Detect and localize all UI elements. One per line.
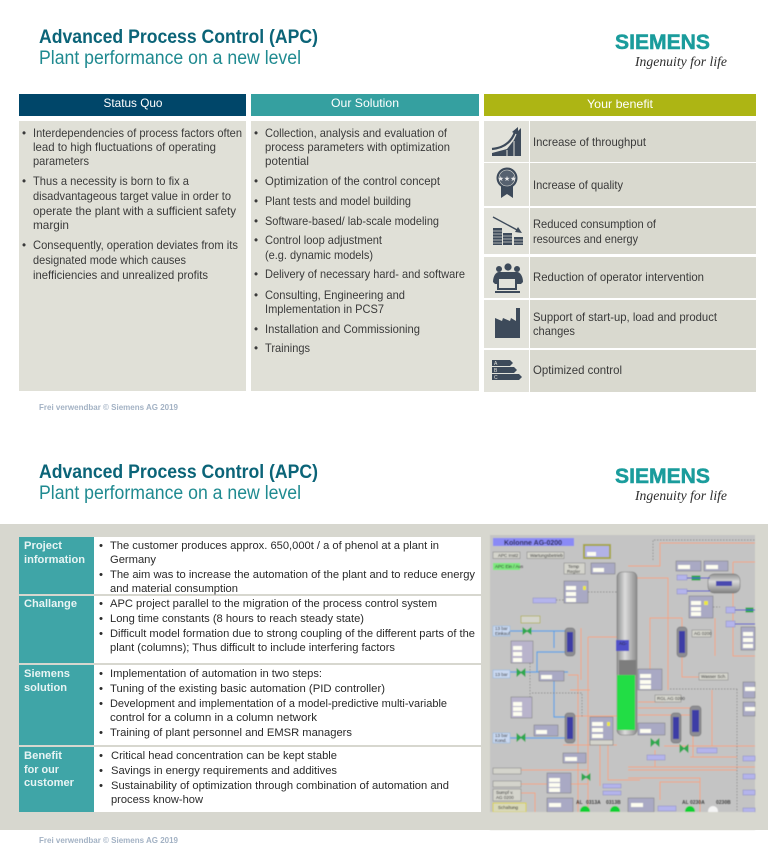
logo: Siemens: SIEMENS <box>615 465 710 488</box>
title: Advanced Process Control: Advanced Process Control (APC) <box>39 27 318 48</box>
heading: Your benefit: Your benefit <box>587 97 654 111</box>
text block: status quo bullets: Thus a necessity is born to fix a <box>33 175 190 188</box>
subtitle: Plant performance: Plant performance on a new level <box>39 48 301 69</box>
control buttons: Wasser Sch. <box>701 674 726 679</box>
row: benefit for our customer: Sustainability of optimization through combination of automation and <box>111 780 449 792</box>
logo: Siemens: SIEMENS <box>615 31 710 54</box>
text block: status quo bullets: margin <box>33 219 69 232</box>
logo: Siemens: Ingenuity for life <box>634 54 727 69</box>
text block: solution bullets: • <box>254 234 258 247</box>
text block: solution bullets: process parameters with optimization <box>265 141 450 154</box>
benefit row: consumption <box>484 208 756 254</box>
text block: solution bullets: Control loop adjustment <box>265 234 383 247</box>
stream labels <box>493 575 755 812</box>
row: challenge: • <box>99 613 103 625</box>
icon: factory <box>495 308 520 338</box>
row: challenge: plant (columns); Thus difficult to include interfering factors <box>110 642 395 654</box>
row: Siemens solution: • <box>99 668 103 680</box>
subtitle: Plant performance: Plant performance on a new level <box>39 483 301 504</box>
text block: status quo bullets: operate the plant with a sufficient safety <box>33 205 236 218</box>
stream labels: 13 bar <box>495 626 508 631</box>
text block: status quo bullets: • <box>22 239 26 252</box>
stream labels: Kond. <box>495 738 507 743</box>
main column AG-0200 <box>616 572 637 735</box>
text block: solution bullets: Collection, analysis and evaluation of <box>265 127 448 140</box>
stream labels: 13 bar <box>495 733 508 738</box>
text block: status quo bullets: designated mode which causes <box>33 254 186 267</box>
icon: energy class bars: C <box>494 375 498 381</box>
control buttons <box>493 552 728 812</box>
control buttons: APC Inst2 <box>498 553 519 558</box>
text block: solution bullets: • <box>254 323 258 336</box>
row: project information: • <box>99 569 103 581</box>
text block: status quo bullets: Interdependencies of process factors often <box>33 127 242 140</box>
row: project information <box>19 537 481 595</box>
row: benefit for our customer: process know-how <box>111 794 204 806</box>
small vessels <box>565 574 740 743</box>
benefit row: optimized control: Optimized control <box>533 364 622 377</box>
row: project information: • <box>99 540 103 552</box>
icon: energy class bars <box>492 360 522 381</box>
benefit row: start-up support: changes <box>533 325 575 338</box>
row: challenge: APC project parallel to the migration of the process control system <box>110 598 437 610</box>
row: benefit for our customer: • <box>99 780 103 792</box>
orange process lines <box>521 543 755 812</box>
process control screenshot <box>490 535 755 830</box>
row: benefit for our customer: Critical head concentration can be kept stable <box>111 750 337 762</box>
row: challenge: • <box>99 598 103 610</box>
main column AG-0200: AG- <box>619 641 628 646</box>
control buttons: AG 0200 <box>694 631 712 636</box>
text block: solution bullets: • <box>254 175 258 188</box>
row: Siemens solution: Implementation of automation in two steps: <box>110 668 322 680</box>
control buttons: Wartungsbetrieb <box>530 553 563 558</box>
row: challenge: Long time constants (8 hours to reach steady state) <box>110 613 364 625</box>
text block: solution bullets <box>254 127 465 355</box>
logo: Siemens <box>615 31 727 69</box>
text block: solution bullets: Software-based/ lab-scale modeling <box>265 215 439 228</box>
row: Siemens solution: • <box>99 698 103 710</box>
panel: status quo <box>19 94 246 391</box>
text block: solution bullets: Consulting, Engineering and <box>265 289 405 302</box>
dotted signal lines <box>530 540 755 812</box>
row: challenge: Difficult model formation due to strong coupling of the different parts of the <box>110 628 475 640</box>
stream labels: AL 0230A <box>682 800 705 806</box>
logo: Siemens <box>615 465 727 503</box>
heading: Status Quo: Status Quo <box>104 96 163 110</box>
text block: status quo bullets: • <box>22 127 26 140</box>
text block: solution bullets: Delivery of necessary hard- and software <box>265 268 465 281</box>
row: project information: The aim was to increase the automation of the plant and to reduce energy <box>110 569 475 581</box>
control buttons: Temp <box>568 564 580 569</box>
row: benefit for our customer: • <box>99 750 103 762</box>
row: Siemens solution: • <box>99 683 103 695</box>
row: benefit for our customer <box>19 747 481 812</box>
grey content band <box>0 524 768 830</box>
row: project information: Germany <box>110 554 156 566</box>
row: Siemens solution: Training of plant personnel and EMSR managers <box>110 727 352 739</box>
table: project details <box>19 537 481 812</box>
icon: people at a laptop <box>493 263 523 293</box>
benefit row: start-up support: Support of start-up, load and product <box>533 311 718 324</box>
row: benefit for our customer: Benefit <box>24 750 62 762</box>
row: project information: The customer produces approx. 650,000t / a of phenol at a plant in <box>110 540 439 552</box>
footer note: Frei verwendbar © Siemens AG 2019 <box>39 835 178 845</box>
row: Siemens solution: Tuning of the existing basic automation (PID controller) <box>110 683 385 695</box>
stream labels: AL <box>576 800 583 806</box>
control buttons: Schaltung <box>498 805 519 810</box>
slide 1: status quo, solution and benefit <box>19 27 756 412</box>
benefit row: operator intervention: Reduction of operator intervention <box>533 271 704 284</box>
title bar: Kolonne AG-0200: Kolonne AG-0200 <box>504 540 562 547</box>
heading: Our Solution <box>251 94 479 116</box>
row: Siemens solution: • <box>99 727 103 739</box>
text block: solution bullets: • <box>254 127 258 140</box>
row: Siemens solution <box>19 665 481 745</box>
control buttons: Sumpf v. <box>496 790 513 795</box>
slide 2: project reference <box>0 462 768 845</box>
panel: our solution <box>251 94 479 391</box>
benefit row: throughput: Increase of throughput <box>533 136 647 149</box>
control buttons: AG 0200 <box>496 795 514 800</box>
row: project information: Project <box>24 540 62 552</box>
icon: rosette badge: ★★★ <box>498 175 516 183</box>
benefit row: throughput <box>484 121 756 162</box>
text block: status quo bullets: Consequently, operation deviates from its <box>33 239 238 252</box>
row: Siemens solution: Development and implementation of a model-predictive multi-variable <box>110 698 447 710</box>
row: Siemens solution: solution <box>24 682 67 694</box>
heading: Our Solution: Our Solution <box>331 96 399 110</box>
logo: Siemens: Ingenuity for life <box>634 488 727 503</box>
benefit row: start-up support <box>484 300 756 348</box>
text block: status quo bullets: lead to high fluctuations of operating <box>33 141 216 154</box>
mask below screenshot <box>490 812 755 830</box>
stream labels: 0313B <box>606 800 621 806</box>
benefit row: consumption: resources and energy <box>533 233 638 246</box>
benefit row: quality <box>484 163 756 206</box>
stream labels: 0230B <box>716 800 731 806</box>
text block: solution bullets: potential <box>265 155 309 168</box>
stream labels: 13 bar <box>495 672 508 677</box>
row: benefit for our customer: • <box>99 765 103 777</box>
valves and pumps <box>517 576 755 816</box>
text block: solution bullets: • <box>254 195 258 208</box>
row: project information: information <box>24 554 85 566</box>
text block: solution bullets: Trainings <box>265 342 310 355</box>
text block: solution bullets: • <box>254 289 258 302</box>
stream labels: 0313A <box>586 800 601 806</box>
text block: solution bullets: Optimization of the control concept <box>265 175 441 188</box>
footer note: Frei verwendbar © Siemens AG 2019 <box>39 402 178 412</box>
benefit row: quality: Increase of quality <box>533 179 623 192</box>
row: challenge: Challange <box>24 598 77 610</box>
row: project information: and material consumption <box>110 583 238 595</box>
icon: coins and falling arrow <box>493 217 523 245</box>
benefit row: consumption: Reduced consumption of <box>533 218 657 231</box>
text block: status quo bullets: • <box>22 175 26 188</box>
blue water lines <box>510 631 568 738</box>
title: Advanced Process Control: Advanced Process Control (APC) <box>39 462 318 483</box>
text block: status quo bullets: inefficiencies and unrealized profits <box>33 269 208 282</box>
text block: status quo bullets: parameters <box>33 155 89 168</box>
title bar: Kolonne AG-0200 <box>493 538 574 547</box>
icon: rosette badge <box>496 168 518 198</box>
heading: Your benefit <box>484 94 756 116</box>
stream labels: Einkauf <box>495 631 511 636</box>
row: challenge <box>19 596 481 663</box>
text block: solution bullets: (e.g. dynamic models) <box>265 249 373 262</box>
text block: status quo bullets: disadvantageous target value in order to <box>33 190 231 203</box>
icon: energy class bars: B <box>494 368 498 374</box>
text block: solution bullets: • <box>254 342 258 355</box>
row: benefit for our customer: customer <box>24 777 75 789</box>
row: Siemens solution: control for a column in a column network <box>110 712 317 724</box>
instrument boxes <box>511 544 755 812</box>
benefit row: optimized control <box>484 350 756 392</box>
icon: rising chart <box>492 127 521 156</box>
row: benefit for our customer: Savings in energy requirements and additives <box>111 765 337 777</box>
control buttons: Regler <box>567 569 581 574</box>
control buttons: RGL AG 0200 <box>657 696 685 701</box>
row: challenge: • <box>99 628 103 640</box>
icon: energy class bars: A <box>494 361 498 367</box>
control buttons: APC Ein / Aus <box>495 564 524 569</box>
text block: status quo bullets <box>22 127 242 282</box>
text block: solution bullets: Installation and Commissioning <box>265 323 420 336</box>
text block: solution bullets: Plant tests and model building <box>265 195 411 208</box>
row: Siemens solution: Siemens <box>24 668 70 680</box>
text block: solution bullets: • <box>254 268 258 281</box>
benefit row: operator intervention <box>484 257 756 298</box>
text block: solution bullets: • <box>254 215 258 228</box>
row: benefit for our customer: for our <box>24 764 60 776</box>
text block: solution bullets: Implementation in PCS7 <box>265 303 384 316</box>
panel: your benefit <box>484 94 756 392</box>
heading: Status Quo <box>19 94 246 116</box>
